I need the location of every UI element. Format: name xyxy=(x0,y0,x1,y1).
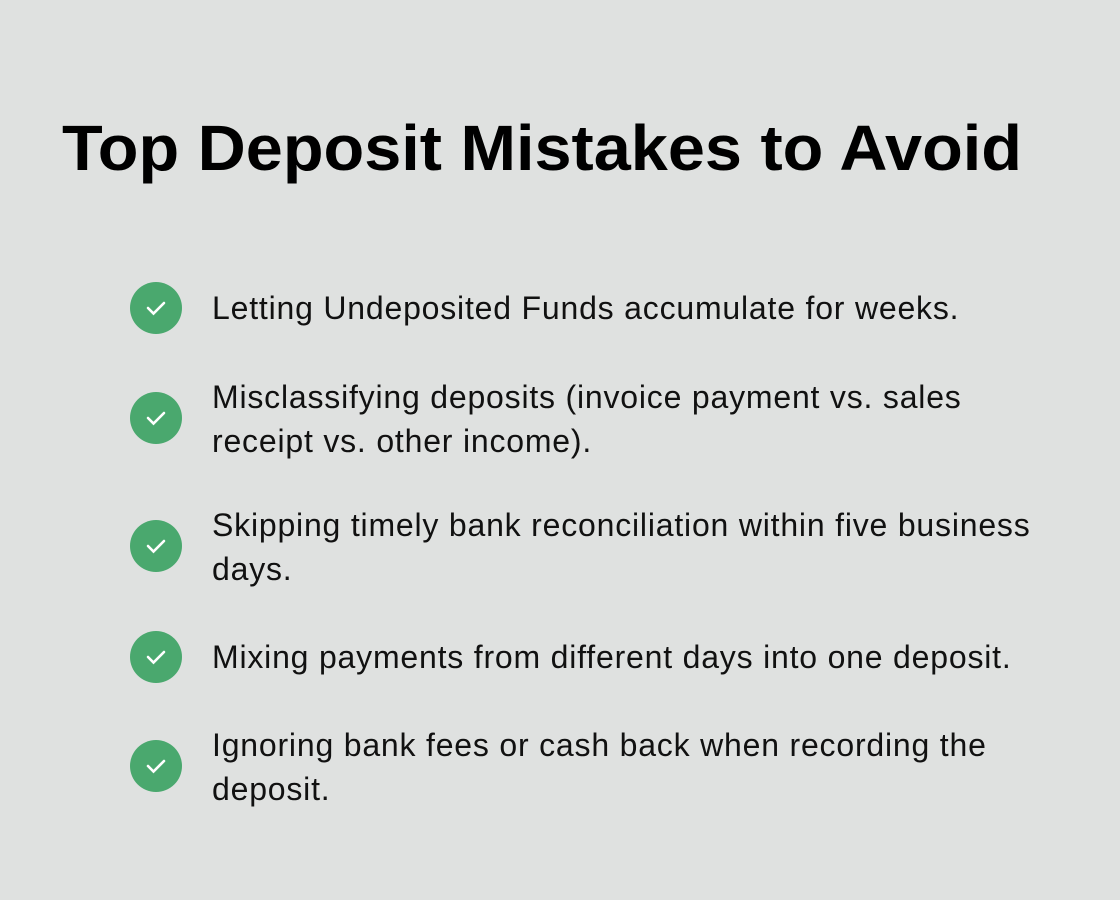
text: Skipping timely bank reconciliation within five business xyxy=(212,507,1031,543)
icon: check xyxy=(130,740,182,792)
text xyxy=(212,507,1031,587)
text: Misclassifying deposits (invoice payment vs. sales xyxy=(212,379,962,415)
item 5 xyxy=(130,727,987,807)
text: days. xyxy=(212,551,292,587)
text: Letting Undeposited Funds accumulate for weeks. xyxy=(212,290,959,326)
text xyxy=(212,379,962,459)
text xyxy=(212,727,987,807)
text: Mixing payments from different days into one deposit. xyxy=(212,639,1012,675)
text: deposit. xyxy=(212,771,330,807)
item 4 xyxy=(130,631,1012,683)
item 1 xyxy=(130,282,959,334)
item 3 xyxy=(130,507,1031,587)
icon: check xyxy=(130,631,182,683)
icon: check xyxy=(130,520,182,572)
item 2 xyxy=(130,379,962,459)
title: Top Deposit Mistakes to Avoid xyxy=(62,112,1022,184)
icon: check xyxy=(130,392,182,444)
text: Ignoring bank fees or cash back when recording the xyxy=(212,727,987,763)
icon: check xyxy=(130,282,182,334)
text: receipt vs. other income). xyxy=(212,423,592,459)
